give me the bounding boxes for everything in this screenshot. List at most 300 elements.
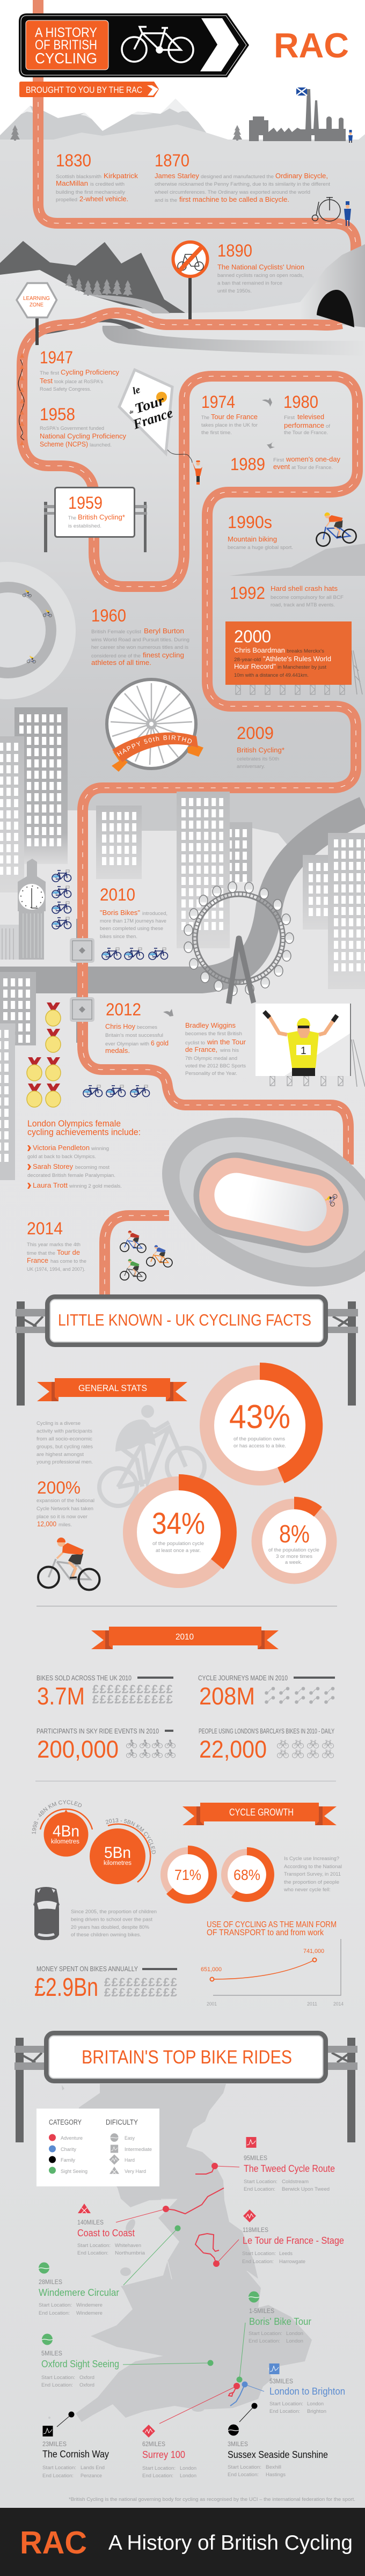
sign: britain's top bike rides bbox=[14, 2033, 357, 2142]
text block: 1990s: Mountain biking bbox=[228, 535, 277, 543]
stat: money spent: £2.9Bn bbox=[34, 1973, 98, 2002]
ride: surrey 100: Surrey 100 bbox=[142, 2449, 185, 2460]
text block: 2010: introduced, bbox=[142, 911, 167, 917]
text block: 1830 bbox=[56, 151, 138, 203]
road shadow swooshes bbox=[40, 295, 365, 356]
RAC logo: RAC bbox=[274, 26, 349, 65]
ride: windermere circular: 28MILES bbox=[39, 2278, 62, 2286]
text block: 2012 chris hoy bbox=[105, 1000, 169, 1055]
text block: 1830: 2-wheel vehicle. bbox=[79, 195, 128, 203]
light hills and lower ground bbox=[0, 270, 365, 848]
ride: windermere circular: Start Location: bbox=[39, 2302, 72, 2308]
text: cycling is a diverse activity: groups, but cycling rates bbox=[36, 1444, 93, 1450]
ride: the tweed cycle route: Coldstream bbox=[282, 2179, 309, 2185]
text block: 1870 bbox=[154, 151, 330, 203]
ride: the tweed cycle route: The Tweed Cycle Route bbox=[244, 2163, 335, 2174]
text block: 2012 chris hoy: becomes bbox=[137, 1024, 157, 1030]
text block: 1980: First bbox=[284, 415, 295, 421]
ride: le tour de france stage: Harrowgate bbox=[279, 2259, 305, 2265]
ride: windermere circular: Windemere Circular bbox=[39, 2287, 119, 2298]
text block: bradley wiggins: de France, bbox=[185, 1045, 217, 1053]
text block: 1974 bbox=[201, 392, 258, 436]
text block: 1980: televised bbox=[297, 413, 324, 421]
ride: london to brighton: Brighton bbox=[307, 2409, 326, 2414]
text block: 1870: designed and manufactured the bbox=[201, 174, 274, 180]
text block: 1992: become compulsory for all BCF bbox=[271, 595, 344, 601]
ride: surrey 100 bbox=[142, 2383, 240, 2479]
ride: coast to coast: Start Location: bbox=[77, 2243, 111, 2249]
text block: 2010: been completed using these bbox=[100, 926, 163, 932]
ride: sussex seaside sunshine: End Location: bbox=[228, 2472, 259, 2478]
wiggins billboard bbox=[256, 1004, 365, 1087]
ride: the cornish way: End Location: bbox=[42, 2473, 74, 2479]
donut chart: 43 percent: 43% bbox=[229, 1399, 290, 1436]
bubble: 5Bn kilometres bbox=[90, 1818, 156, 1884]
text block: 2014: 2014 bbox=[27, 1219, 63, 1238]
ride: boris bike tour: London bbox=[286, 2331, 303, 2337]
legend panel: Easy bbox=[125, 2135, 135, 2141]
text block: bradley wiggins: cyclist to bbox=[185, 1040, 205, 1046]
legend panel bbox=[36, 2109, 159, 2186]
tour de france sign: le bbox=[131, 384, 142, 397]
donut chart: 8 percent: a week. bbox=[285, 1560, 302, 1565]
donut chart: 8 percent: 3 or more times bbox=[276, 1554, 312, 1560]
text block: 1958 bbox=[40, 405, 126, 448]
2000 billboard: 28-year-old bbox=[234, 657, 261, 663]
text block: london olympics: Victoria Pendleton bbox=[33, 1144, 90, 1152]
text block: 1960: wins World Road and Pursuit titles. During bbox=[91, 637, 189, 643]
text block: 1960: considered one of the bbox=[91, 653, 141, 659]
text block: bradley wiggins: voted the 2012 BBC Sports bbox=[185, 1063, 246, 1069]
tour de france sign: Tour bbox=[133, 392, 166, 416]
text block: 1830: Kirkpatrick bbox=[104, 172, 138, 180]
medals bbox=[27, 1002, 61, 1107]
stat: money spent: ££££££££££ bbox=[104, 1975, 178, 1989]
footnote: *British Cycling is the national governing body for cycling as recognised by the UCI – the international federation for the sport. bbox=[69, 2497, 355, 2502]
ride: boris bike tour: Start Location: bbox=[249, 2331, 282, 2337]
bubble: 5Bn kilometres: 2013 - 5BN KM CYCLED bbox=[105, 1818, 156, 1854]
ride: sussex seaside sunshine bbox=[228, 2403, 328, 2478]
donut chart: 71 percent bbox=[164, 1846, 217, 1904]
stat: bikes sold: £££££££££££ bbox=[92, 1682, 173, 1696]
brought to you banner: BROUGHT TO YOU BY THE RAC bbox=[26, 85, 142, 95]
text block: 2010 bbox=[100, 885, 167, 940]
ride: the cornish way: Penzance bbox=[81, 2473, 102, 2479]
legend panel: Adventure bbox=[61, 2135, 83, 2141]
2000 billboard: 10m with a distance of 49.441km. bbox=[234, 672, 309, 678]
text block: 1890 bbox=[217, 241, 304, 294]
heading: main form of transport bbox=[207, 1920, 337, 1937]
stat: barclays bikes bbox=[199, 1728, 334, 1763]
stat: barclays bikes: 22,000 bbox=[199, 1736, 267, 1763]
text block: 1870: and is the bbox=[155, 197, 177, 203]
text block: 2009: 2009 bbox=[237, 723, 274, 743]
text block: 2010: more than 17M journeys have bbox=[100, 918, 166, 924]
sign: little known facts bbox=[16, 1297, 358, 1406]
text block: 1890: banned cyclists racing on open roads, bbox=[217, 273, 304, 279]
title bbox=[26, 20, 108, 70]
icon: penny farthing and rider bbox=[312, 197, 351, 226]
donut chart: 34 percent: at least once a year. bbox=[156, 1548, 201, 1554]
ride: sussex seaside sunshine: Sussex Seaside Sunshine bbox=[228, 2449, 328, 2460]
icon: man in top hat bbox=[348, 130, 353, 143]
tour de france sign: France bbox=[130, 405, 174, 433]
text block: 1958: Scheme (NCPS) bbox=[40, 440, 88, 448]
ride: london to brighton: 53MILES bbox=[269, 2377, 293, 2385]
text block: 1958: National Cycling Proficiency bbox=[40, 432, 126, 440]
stat: bikes sold: BIKES SOLD ACROSS THE UK 2010 bbox=[36, 1674, 132, 1682]
2000 billboard: 2000 bbox=[234, 627, 271, 646]
learning zone sign bbox=[17, 283, 57, 345]
ride: surrey 100: London bbox=[180, 2473, 196, 2479]
ride: the cornish way: 23MILES bbox=[42, 2440, 67, 2448]
icon: victorious cyclist in yellow jersey: 1 bbox=[301, 1045, 306, 1057]
stat: money spent: ££££££££££ bbox=[104, 1986, 178, 1999]
text: cycling is a diverse activity: Cycling is a diverse bbox=[36, 1421, 81, 1426]
text block: 1947: 1947 bbox=[40, 348, 73, 367]
text: is cycle use increasing: Is Cycle use Increasing? bbox=[284, 1856, 339, 1862]
legend panel: Sight Seeing bbox=[61, 2169, 87, 2175]
text block: 1947: Road Safety Congress. bbox=[40, 386, 91, 392]
ride: boris bike tour: Boris' Bike Tour bbox=[249, 2316, 311, 2327]
text block: london olympics: winning 2 gold medals. bbox=[69, 1183, 122, 1189]
boris bikes column bbox=[52, 870, 71, 929]
ride: windermere circular: End Location: bbox=[39, 2310, 70, 2316]
text block: 2014 bbox=[27, 1219, 86, 1272]
text block: 1960 bbox=[91, 606, 189, 667]
donut chart: 43 percent bbox=[207, 1363, 323, 1483]
london eye bbox=[184, 882, 294, 1004]
text block: 1974: Tour de France bbox=[211, 413, 258, 421]
donut chart: 8 percent: 8% bbox=[279, 1520, 310, 1548]
stat: sky ride participants: 200,000 bbox=[37, 1736, 119, 1763]
learning zone sign: LEARNING bbox=[23, 295, 50, 302]
footer title: A History of British Cycling bbox=[108, 2531, 353, 2555]
ride: le tour de france stage: Start Location: bbox=[242, 2251, 276, 2257]
ride: surrey 100: 62MILES bbox=[142, 2440, 165, 2448]
icon: white chevron bbox=[200, 18, 239, 71]
icon: car from above bbox=[33, 1887, 60, 1940]
ride: london to brighton: London to Brighton bbox=[269, 2386, 345, 2397]
stat: bikes sold: £££££££££££ bbox=[92, 1693, 173, 1706]
general stats ribbon bbox=[37, 1378, 187, 1401]
line chart: cycling to work bbox=[201, 1939, 344, 2007]
text block: 1890: a ban that remained in force bbox=[217, 280, 282, 287]
text block: london olympics: gold at back to back Olympics. bbox=[27, 1154, 96, 1160]
text block: 1830: Scottish blacksmith bbox=[56, 174, 101, 180]
text block: 2012 chris hoy: 2012 bbox=[106, 1000, 141, 1019]
text block: 2009: celebrates its 50th bbox=[237, 756, 279, 762]
text: 200 percent expansion: miles. bbox=[59, 1522, 72, 1528]
text block: 1974: takes place in the UK for bbox=[201, 422, 258, 428]
text block: 1960: Beryl Burton bbox=[144, 627, 184, 635]
text block: 2014: Tour de bbox=[57, 1248, 80, 1256]
legend panel: Family bbox=[61, 2157, 75, 2163]
text block: london olympics: cycling achievements include: bbox=[27, 1128, 141, 1137]
line chart: cycling to work: 2001 bbox=[207, 2001, 217, 2007]
text block: 1980: of bbox=[326, 423, 330, 429]
tour de france sign bbox=[119, 370, 174, 453]
text block: 1870: otherwise nicknamed the Penny Farthing, due to its similarity in the different bbox=[155, 181, 330, 187]
sign: britain's top bike rides: BRITAIN'S TOP BIKE RIDES bbox=[82, 2047, 292, 2068]
title: A HISTORY bbox=[35, 25, 97, 40]
text block: bradley wiggins: wins his bbox=[220, 1048, 239, 1053]
ride: surrey 100: End Location: bbox=[142, 2473, 173, 2479]
ride: london to brighton bbox=[230, 2363, 345, 2414]
big ben tower bbox=[0, 859, 46, 960]
text block: bradley wiggins: Bradley Wiggins bbox=[185, 1021, 236, 1029]
2010 ribbon: 2010 bbox=[176, 1633, 194, 1642]
text: 200 percent expansion: place so it is now over bbox=[36, 1514, 87, 1520]
donut chart: 71 percent: 71% bbox=[174, 1867, 201, 1883]
ride: london to brighton: End Location: bbox=[269, 2409, 300, 2414]
text: 200 percent expansion: expansion of the National bbox=[36, 1498, 94, 1504]
sign: little known facts: LITTLE KNOWN - UK CYCLING FACTS bbox=[58, 1311, 311, 1329]
ride: le tour de france stage: Leeds bbox=[279, 2251, 293, 2257]
donut chart: 34 percent: 34% bbox=[152, 1506, 205, 1541]
ride: oxford sight seeing: End Location: bbox=[41, 2382, 73, 2388]
traffic cones and wiggle line bbox=[18, 353, 24, 445]
ride: sussex seaside sunshine: Hastings bbox=[266, 2472, 286, 2478]
text block: 1960: finest cycling bbox=[143, 651, 184, 659]
donut chart: 8 percent: of the population cycle bbox=[268, 1547, 319, 1553]
stat: bikes sold bbox=[36, 1674, 173, 1710]
ride: sussex seaside sunshine: Start Location: bbox=[228, 2464, 261, 2470]
icon: orange cyclist bbox=[38, 1538, 100, 1590]
text: cycling is a diverse activity: young professional men. bbox=[36, 1459, 93, 1465]
legend panel: Intermediate bbox=[125, 2147, 152, 2153]
bicycle wheel with birthday ribbon bbox=[105, 678, 203, 772]
1959 road sign: British Cycling* bbox=[78, 513, 125, 521]
boris bikes second row bbox=[83, 1085, 149, 1097]
legend panel: Hard bbox=[125, 2157, 135, 2163]
text block: london olympics: winning bbox=[91, 1146, 109, 1152]
text block: 1960: athletes of all time. bbox=[91, 658, 151, 667]
text block: 1830: building the first mechanically bbox=[56, 189, 125, 195]
text block: 1890: until the 1950s. bbox=[217, 288, 252, 294]
ride: the tweed cycle route bbox=[195, 2137, 335, 2192]
brought to you banner bbox=[19, 82, 159, 97]
learning zone sign: ZONE bbox=[30, 302, 43, 308]
text block: 1974: 1974 bbox=[201, 392, 235, 412]
no cycling sign bbox=[173, 242, 207, 319]
ride: coast to coast: 140MILES bbox=[77, 2219, 104, 2226]
river Thames bbox=[0, 809, 365, 980]
icon: factory with chimneys bbox=[249, 87, 346, 141]
ride: sussex seaside sunshine: 3MILES bbox=[228, 2440, 248, 2448]
2000 billboard: "Athlete's Rules World bbox=[263, 655, 331, 663]
text block: 1960: British Female cyclist bbox=[91, 629, 141, 635]
text block: london olympics: decorated British female Paralympian. bbox=[27, 1173, 115, 1179]
road: winding main stretch bbox=[22, 313, 357, 1165]
ride: boris bike tour: 1-5MILES bbox=[249, 2307, 274, 2315]
text block: 1870: wheel circumferences. The Ordinary was exported around the world bbox=[154, 189, 310, 195]
icon: white bicycle bbox=[122, 27, 193, 62]
2000 billboard: Chris Boardman bbox=[234, 646, 285, 654]
text block: 1830: 1830 bbox=[56, 151, 91, 170]
text block: 1989 bbox=[230, 455, 340, 474]
title sign bbox=[19, 13, 249, 77]
line chart: cycling to work: 651,000 bbox=[201, 1966, 222, 1973]
text: 200 percent expansion: 200% bbox=[37, 1478, 81, 1497]
ride: the tweed cycle route: Berwick Upon Tweed bbox=[282, 2186, 330, 2192]
stat: bikes sold: 3.7M bbox=[37, 1682, 85, 1710]
icon: tunnel entrance bbox=[317, 290, 354, 327]
text block: 1989: women's one-day bbox=[286, 455, 340, 463]
2000 billboard: Hour Record" bbox=[234, 662, 276, 670]
text block: 1989: event bbox=[273, 463, 290, 471]
donut chart: 34 percent: of the population cycle bbox=[152, 1541, 204, 1547]
text block: 1870: James Starley bbox=[155, 172, 199, 180]
text block: 2012 chris hoy: ever Olympian with bbox=[105, 1041, 149, 1047]
text block: london olympics: becoming most bbox=[75, 1165, 110, 1170]
text block: 1980: performance bbox=[284, 421, 324, 429]
text block: 1989: 1989 bbox=[230, 455, 265, 474]
text block: 1958: launched. bbox=[90, 442, 112, 448]
text: is cycle use increasing: who never cycle fell: bbox=[283, 1887, 331, 1893]
text block: 1989: at Tour de France. bbox=[291, 465, 333, 471]
2000 billboard bbox=[225, 621, 362, 694]
donut chart: 68 percent bbox=[224, 1847, 274, 1902]
donut chart: 68 percent: 68% bbox=[233, 1867, 260, 1883]
ride: london to brighton: Start Location: bbox=[269, 2401, 303, 2407]
arrow: hoy to wiggins bbox=[163, 1009, 173, 1016]
ride: coast to coast: Northumbria bbox=[115, 2250, 145, 2256]
ride: coast to coast bbox=[77, 2188, 224, 2256]
arrow: 1980 to 1989 bbox=[267, 441, 275, 449]
text block: 1974: The bbox=[201, 415, 209, 421]
donut chart: 43 percent: of the population owns bbox=[233, 1436, 285, 1442]
1959 road sign: The bbox=[68, 515, 76, 521]
icon: mountain biker bbox=[312, 508, 357, 548]
ride: the cornish way: The Cornish Way bbox=[42, 2449, 109, 2460]
text block: london olympics: Sarah Storey bbox=[33, 1162, 73, 1170]
tour de france sign: de bbox=[129, 409, 134, 415]
text block: 2012 chris hoy: 6 gold bbox=[151, 1039, 169, 1047]
text block: 2010: "Boris Bikes" bbox=[100, 909, 140, 917]
ride: le tour de france stage: Le Tour de France - Stage bbox=[243, 2235, 344, 2246]
legend panel: Charity bbox=[61, 2147, 76, 2153]
line chart: cycling to work: 741,000 bbox=[303, 1948, 324, 1955]
footer RAC logo: RAC bbox=[20, 2525, 87, 2560]
text: school run: Since 2005, the proportion of children bbox=[71, 1909, 157, 1915]
text block: 1947: Cycling Proficiency bbox=[61, 368, 119, 376]
text: school run: of these children owning bikes. bbox=[71, 1932, 141, 1938]
text block: 1990s: became a huge global sport. bbox=[228, 545, 293, 551]
hill behind mountain biker bbox=[229, 544, 365, 576]
stat: cycle journeys bbox=[198, 1674, 335, 1710]
text block: 1990s bbox=[228, 513, 293, 551]
text block: 1890: 1890 bbox=[217, 241, 252, 260]
velodrome ring, upper left bbox=[0, 562, 76, 699]
ride: the tweed cycle route: End Location: bbox=[244, 2186, 275, 2192]
legend panel: DIFICULTY bbox=[106, 2118, 138, 2126]
ground front hill bbox=[0, 125, 365, 161]
2010 ribbon bbox=[91, 1627, 279, 1649]
bicycle wheel with birthday ribbon: HAPPY 50th BIRTHDAY bbox=[117, 735, 192, 757]
tunnel hill bbox=[243, 244, 365, 327]
text: school run: 20 years has doubled, despite 80% bbox=[71, 1924, 150, 1930]
text block: 1870: 1870 bbox=[155, 151, 189, 170]
ride: the cornish way: Lands End bbox=[81, 2465, 105, 2471]
text block: 1992: Hard shell crash hats bbox=[271, 584, 338, 592]
legend panel: CATEGORY bbox=[49, 2118, 82, 2126]
text block: 1960: 1960 bbox=[91, 606, 126, 625]
general stats ribbon: GENERAL STATS bbox=[78, 1383, 147, 1393]
road: final stretch bbox=[105, 1216, 169, 1296]
line chart: cycling to work: 2014 bbox=[333, 2001, 344, 2007]
text block: 2014: France bbox=[27, 1256, 48, 1264]
icon: scottish flag bbox=[296, 87, 307, 96]
1959 road sign: is established. bbox=[68, 523, 101, 529]
text block: 1960: her career she won numerous titles and is bbox=[91, 645, 188, 650]
ride: windermere circular: Windemere bbox=[76, 2302, 103, 2308]
text block: 1870: Ordinary Bicycle, bbox=[275, 172, 328, 180]
text block: 1830: MacMillan bbox=[56, 179, 88, 187]
1959 road sign bbox=[44, 487, 147, 552]
text block: bradley wiggins: becomes the first British bbox=[185, 1031, 242, 1037]
ride: le tour de france stage: End Location: bbox=[242, 2259, 274, 2265]
text block: 1958: RoSPA's Government funded bbox=[40, 426, 104, 431]
icon: victorious cyclist in yellow jersey bbox=[264, 1012, 337, 1076]
text block: bradley wiggins: win the Tour bbox=[207, 1038, 246, 1046]
2000 billboard: in Manchester by just bbox=[278, 664, 326, 670]
stat: sky ride participants bbox=[36, 1728, 175, 1763]
map of great britain bbox=[48, 2084, 312, 2422]
title: OF BRITISH bbox=[35, 38, 97, 53]
text block: 1992: 1992 bbox=[230, 583, 265, 603]
text block: 2014: has come to the bbox=[50, 1258, 86, 1264]
ride: the cornish way: Start Location: bbox=[42, 2465, 76, 2471]
text block: 1992 bbox=[230, 583, 344, 608]
ride: sussex seaside sunshine: Bexhill bbox=[266, 2464, 281, 2470]
cycle growth ribbon: CYCLE GROWTH bbox=[229, 1806, 294, 1818]
text: 200 percent expansion: 12,000 bbox=[37, 1520, 56, 1528]
ride: windermere circular: Windemere bbox=[76, 2310, 103, 2316]
velodrome bbox=[135, 1084, 365, 1320]
text block: 2009 bbox=[237, 723, 284, 770]
text block: 2009: British Cycling* bbox=[237, 746, 284, 754]
stat: money spent: MONEY SPENT ON BIKES ANNUALLY bbox=[36, 1965, 138, 1973]
2000 billboard: breaks Merckx's bbox=[287, 648, 324, 654]
text block: 1980: the Tour de France. bbox=[284, 430, 328, 436]
donut chart: 43 percent: or has access to a bike. bbox=[233, 1443, 286, 1449]
ride: the tweed cycle route: Start Location: bbox=[244, 2179, 278, 2185]
ride: le tour de france stage bbox=[195, 2209, 344, 2267]
text: is cycle use increasing: According to the National bbox=[284, 1864, 342, 1870]
silhouette: grey cyclist bbox=[99, 1405, 205, 1506]
text block: 2012 chris hoy: Britain's most successful bbox=[105, 1033, 163, 1038]
buildings: city skyline bbox=[0, 707, 365, 1180]
donut chart: 34 percent bbox=[130, 1474, 237, 1581]
text block: 1992: road, track and MTB events. bbox=[271, 602, 335, 608]
ride: the cornish way bbox=[42, 2412, 109, 2479]
cycle growth ribbon bbox=[182, 1803, 337, 1825]
ride: the tweed cycle route: 95MILES bbox=[244, 2154, 267, 2162]
title: CYCLING bbox=[35, 50, 97, 67]
text: is cycle use increasing: the proportion of people bbox=[284, 1879, 339, 1885]
text block: bradley wiggins: 7th Olympic medal and bbox=[185, 1056, 237, 1062]
ride: coast to coast: Whitehaven bbox=[115, 2243, 141, 2249]
text: school run: being driven to school over the past bbox=[71, 1917, 152, 1922]
bubble: 4Bn kilometres: kilometres bbox=[51, 1839, 79, 1845]
text block: london olympics: London Olympics female bbox=[27, 1119, 121, 1129]
ride: oxford sight seeing: Oxford Sight Seeing bbox=[41, 2359, 119, 2369]
text: cycling is a diverse activity: activity with participants bbox=[36, 1429, 92, 1434]
text block: 1974: the first time. bbox=[201, 430, 232, 436]
dark mountains bbox=[0, 241, 185, 313]
ride: london to brighton: London bbox=[307, 2401, 324, 2407]
